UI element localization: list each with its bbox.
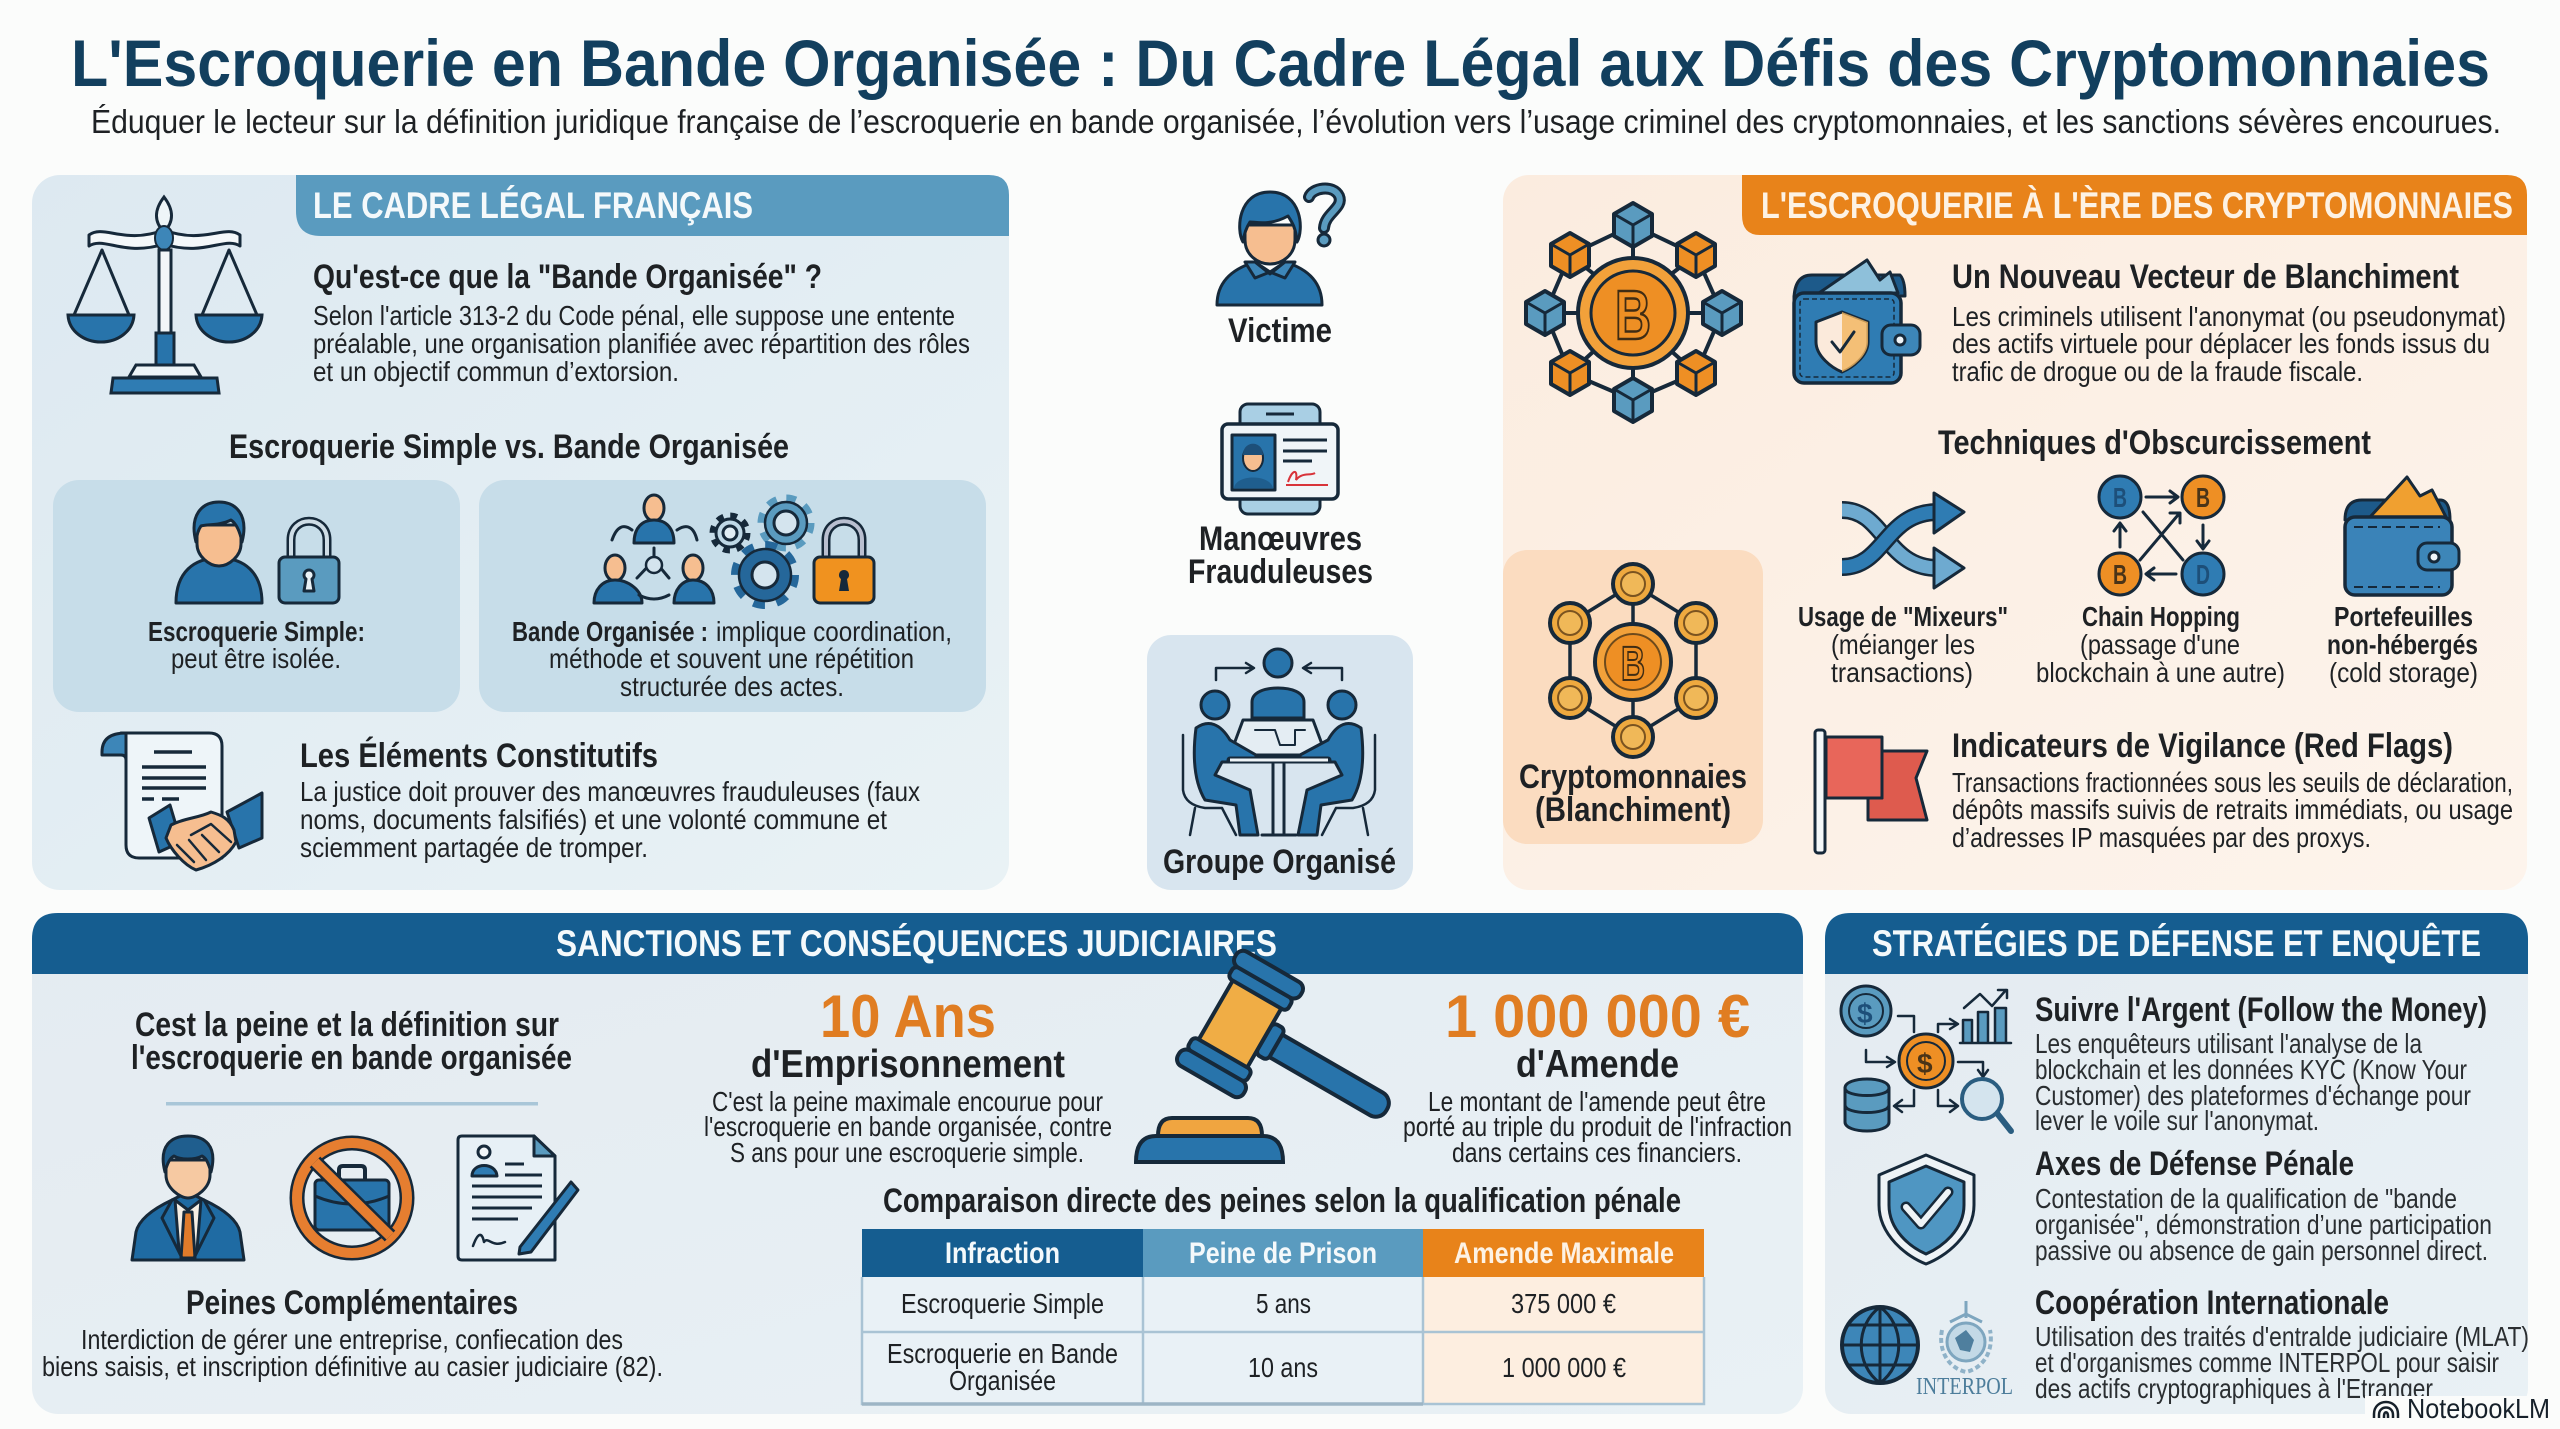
icon: chain hopping coins: B xyxy=(2196,482,2210,513)
icon: chain hopping coins: B xyxy=(2113,482,2127,513)
table: comparison of penalties: Peine de Prison xyxy=(1189,1237,1377,1270)
icon: wallet with shield xyxy=(1794,260,1920,383)
label: cryptomonnaies blanchiment: (Blanchiment) xyxy=(1535,791,1731,829)
label: chain hopping xyxy=(2036,601,2285,688)
icon: signed document with pen xyxy=(458,1136,578,1260)
text: bande organisée: structurée des actes. xyxy=(620,671,844,702)
icon: coin network xyxy=(1550,564,1716,757)
label: portefeuilles xyxy=(2327,601,2478,688)
text: bande organisée: Bande Organisée : xyxy=(512,616,708,647)
panel: stratégies de défense et enquête xyxy=(1825,913,2529,1414)
icon: follow the money flow xyxy=(1841,986,2011,1131)
icon: interpol emblem: INTERPOL xyxy=(1916,1374,2013,1400)
heading: peine et définition xyxy=(131,1006,572,1077)
icon: contract and handshake xyxy=(102,733,262,870)
badge: notebooklm xyxy=(2365,1393,2560,1429)
technique: portefeuilles xyxy=(2327,477,2478,688)
stat: 1 000 000 euros xyxy=(1403,983,1792,1168)
text: peines complémentaires: Interdiction de gérer une entreprise, confiecation des xyxy=(81,1324,623,1355)
panel: le cadre légal français xyxy=(32,175,1009,890)
label: mixeurs: (méianger les xyxy=(1831,629,1975,660)
technique: chain hopping xyxy=(2036,476,2285,688)
stat: 1 000 000 euros: dans certains ces financiers. xyxy=(1452,1137,1742,1168)
label: groupe organisé: Groupe Organisé xyxy=(1163,843,1396,881)
text: éléments constitutifs: sciemment partagée de tromper. xyxy=(300,832,648,863)
text: nouveau vecteur xyxy=(1952,301,2506,387)
table: comparison of penalties: Organisée xyxy=(949,1365,1056,1396)
icon: red flag xyxy=(1815,730,1927,853)
text: suivre l'argent: lever le voile sur l'anonymat. xyxy=(2035,1105,2319,1136)
icon: gavel xyxy=(1136,948,1420,1166)
label: manœuvres frauduleuses: Frauduleuses xyxy=(1188,553,1373,591)
centre: groupe organisé xyxy=(1147,635,1413,890)
heading: nouveau vecteur: Un Nouveau Vecteur de Blanchiment xyxy=(1952,258,2459,296)
text: nouveau vecteur: trafic de drogue ou de la fraude fiscale. xyxy=(1952,356,2363,387)
label: cryptomonnaies blanchiment: Cryptomonnaies xyxy=(1519,758,1747,796)
centre: manœuvres frauduleuses xyxy=(1188,404,1373,591)
heading: peine et définition: Cest la peine et la définition sur xyxy=(135,1006,559,1044)
stat: 10 ans xyxy=(704,983,1112,1168)
table: comparison of penalties: Escroquerie en Bande xyxy=(887,1338,1118,1369)
label: portefeuilles: Portefeuilles xyxy=(2334,601,2473,632)
icon: scales of justice xyxy=(68,197,262,393)
icon: coordinated group, gears and lock xyxy=(594,495,874,603)
table: comparison of penalties: Infraction xyxy=(945,1237,1060,1270)
text: bande organisée: implique coordination, xyxy=(716,616,952,647)
label: chain hopping: (passage d'une xyxy=(2080,629,2240,660)
text: article 313-2 xyxy=(313,300,970,387)
heading: comparaison: Comparaison directe des peines selon la qualification pénale xyxy=(883,1182,1681,1220)
heading: indicateurs de vigilance: Indicateurs de Vigilance (Red Flags) xyxy=(1952,727,2453,765)
label: chain hopping: blockchain à une autre) xyxy=(2036,657,2285,688)
heading: éléments constitutifs: Les Éléments Constitutifs xyxy=(300,737,658,775)
text: bande organisée xyxy=(512,616,952,702)
text: bande organisée: méthode et souvent une répétition xyxy=(549,643,914,674)
icon: globe xyxy=(1842,1307,1918,1383)
heading: peine et définition: l'escroquerie en bande organisée xyxy=(131,1039,572,1077)
icon: follow the money flow: $ xyxy=(1857,998,1873,1029)
text: peines complémentaires xyxy=(42,1324,663,1382)
stat: 1 000 000 euros: porté au triple du produit de l'infraction xyxy=(1403,1111,1792,1142)
table: comparison of penalties: 5 ans xyxy=(1256,1288,1311,1319)
icon: shuffle arrows xyxy=(1842,493,1964,588)
text: axes de défense xyxy=(2035,1183,2492,1266)
header: le cadre légal xyxy=(296,175,1009,236)
icon: businessman xyxy=(132,1136,244,1260)
label: victime: Victime xyxy=(1228,312,1332,350)
card: cryptomonnaies blanchiment xyxy=(1503,550,1763,844)
label: mixeurs: transactions) xyxy=(1831,657,1973,688)
stat: 10 ans: d'Emprisonnement xyxy=(751,1043,1065,1086)
icon: bitcoin network xyxy=(1526,203,1741,422)
text: coopération internationale xyxy=(2035,1321,2529,1404)
icon: victim with question mark xyxy=(1217,189,1340,305)
text: suivre l'argent: Customer) des plateformes d'échange pour xyxy=(2035,1080,2471,1111)
label: mixeurs: Usage de "Mixeurs" xyxy=(1798,601,2008,632)
stat: 10 ans: 10 Ans xyxy=(820,983,996,1050)
text: indicateurs de vigilance xyxy=(1952,767,2513,853)
heading: techniques: Techniques d'Obscurcissement xyxy=(1938,424,2371,462)
text: suivre l'argent: Les enquêteurs utilisant l'analyse de la xyxy=(2035,1028,2422,1059)
icon: group around a table xyxy=(1183,649,1375,835)
icon: forbidden briefcase xyxy=(297,1143,407,1253)
panel: sanctions et conséquences judiciaires xyxy=(32,913,1803,1414)
text: suivre l'argent xyxy=(2035,1028,2471,1136)
label: portefeuilles: (cold storage) xyxy=(2329,657,2478,688)
stat: 10 ans: l'escroquerie en bande organisée, contre xyxy=(704,1111,1112,1142)
icon: chain hopping coins: B xyxy=(2113,559,2127,590)
icon: defence shield xyxy=(1879,1155,1974,1264)
text: escroquerie simple: peut être isolée. xyxy=(171,643,341,674)
table: comparison of penalties: Amende Maximale xyxy=(1454,1237,1674,1270)
heading: bande organisée: Qu'est-ce que la "Bande Organisée" ? xyxy=(313,258,822,296)
stat: 1 000 000 euros: d'Amende xyxy=(1516,1043,1679,1086)
heading: axes de défense: Axes de Défense Pénale xyxy=(2035,1145,2354,1183)
text: axes de défense: Contestation de la qualification de "bande xyxy=(2035,1183,2457,1214)
stat: 10 ans: S ans pour une escroquerie simple. xyxy=(730,1137,1084,1168)
stat: 1 000 000 euros: Le montant de l'amende peut être xyxy=(1428,1086,1766,1117)
text: article 313-2: Selon l'article 313-2 du Code pénal, elle suppose une entente xyxy=(313,300,955,331)
table: comparison of penalties: 1 000 000 € xyxy=(1502,1352,1626,1383)
icon: interpol emblem xyxy=(1916,1301,2013,1400)
icon: forged id card xyxy=(1222,404,1338,514)
header: stratégies xyxy=(1825,913,2528,974)
text: éléments constitutifs xyxy=(300,776,920,863)
text: article 313-2: préalable, une organisation planifiée avec répartition des rôles xyxy=(313,328,970,359)
technique: mixeurs xyxy=(1798,493,2008,688)
panel: l'escroquerie à l'ère des cryptomonnaies xyxy=(1503,175,2527,890)
label: chain hopping: Chain Hopping xyxy=(2082,601,2240,632)
text: peines complémentaires: biens saisis, et inscription définitive au casier judiciaire (82). xyxy=(42,1351,663,1382)
icon: person with lock xyxy=(176,502,339,603)
heading: coopération internationale: Coopération Internationale xyxy=(2035,1284,2389,1322)
icon: chain hopping coins xyxy=(2099,476,2224,595)
card: bande organisée xyxy=(479,480,986,712)
text: éléments constitutifs: noms, documents falsifiés) et une volonté commune et xyxy=(300,804,887,835)
header: sanctions: SANCTIONS ET CONSÉQUENCES JUDICIAIRES xyxy=(556,923,1277,964)
label: portefeuilles: non-hébergés xyxy=(2327,629,2478,660)
icon: orange-notes wallet xyxy=(2345,477,2459,595)
text: article 313-2: et un objectif commun d’extorsion. xyxy=(313,356,679,387)
icon: follow the money flow: $ xyxy=(1917,1048,1933,1079)
heading: simple vs bande: Escroquerie Simple vs. Bande Organisée xyxy=(229,428,789,466)
text: coopération internationale: des actifs cryptographiques à l'Etranger xyxy=(2035,1373,2433,1404)
table: comparison of penalties: Escroquerie Simple xyxy=(901,1288,1104,1319)
header: sanctions xyxy=(32,913,1803,974)
label: mixeurs xyxy=(1798,601,2008,688)
text: éléments constitutifs: La justice doit prouver des manœuvres frauduleuses (faux xyxy=(300,776,920,807)
text: escroquerie simple: Escroquerie Simple: xyxy=(148,616,365,647)
label: manœuvres frauduleuses: Manœuvres xyxy=(1199,520,1362,558)
stat: 10 ans: C'est la peine maximale encourue pour xyxy=(712,1086,1103,1117)
text: nouveau vecteur: des actifs virtuele pour déplacer les fonds issus du xyxy=(1952,328,2490,359)
centre: victime xyxy=(1217,189,1340,350)
icon: chain hopping coins: D xyxy=(2196,559,2210,590)
icon: bitcoin network: B xyxy=(1615,276,1651,354)
card: escroquerie simple xyxy=(53,480,460,712)
text: suivre l'argent: blockchain et les données KYC (Know Your xyxy=(2035,1054,2467,1085)
label: manœuvres frauduleuses xyxy=(1188,520,1373,591)
header: le cadre légal: LE CADRE LÉGAL FRANÇAIS xyxy=(313,185,753,226)
table: comparison of penalties: 375 000 € xyxy=(1511,1288,1616,1319)
text: escroquerie simple xyxy=(148,616,365,674)
label: cryptomonnaies blanchiment xyxy=(1519,758,1747,829)
text: indicateurs de vigilance: d’adresses IP masquées par des proxys. xyxy=(1952,822,2371,853)
icon: coin network: B xyxy=(1621,638,1645,691)
table: comparison of penalties: 10 ans xyxy=(1248,1352,1318,1383)
stat: 1 000 000 euros: 1 000 000 € xyxy=(1445,983,1750,1050)
heading: peines complémentaires: Peines Complémentaires xyxy=(186,1284,518,1322)
table: comparison of penalties xyxy=(862,1229,1704,1404)
header: cryptomonnaies xyxy=(1742,175,2527,235)
